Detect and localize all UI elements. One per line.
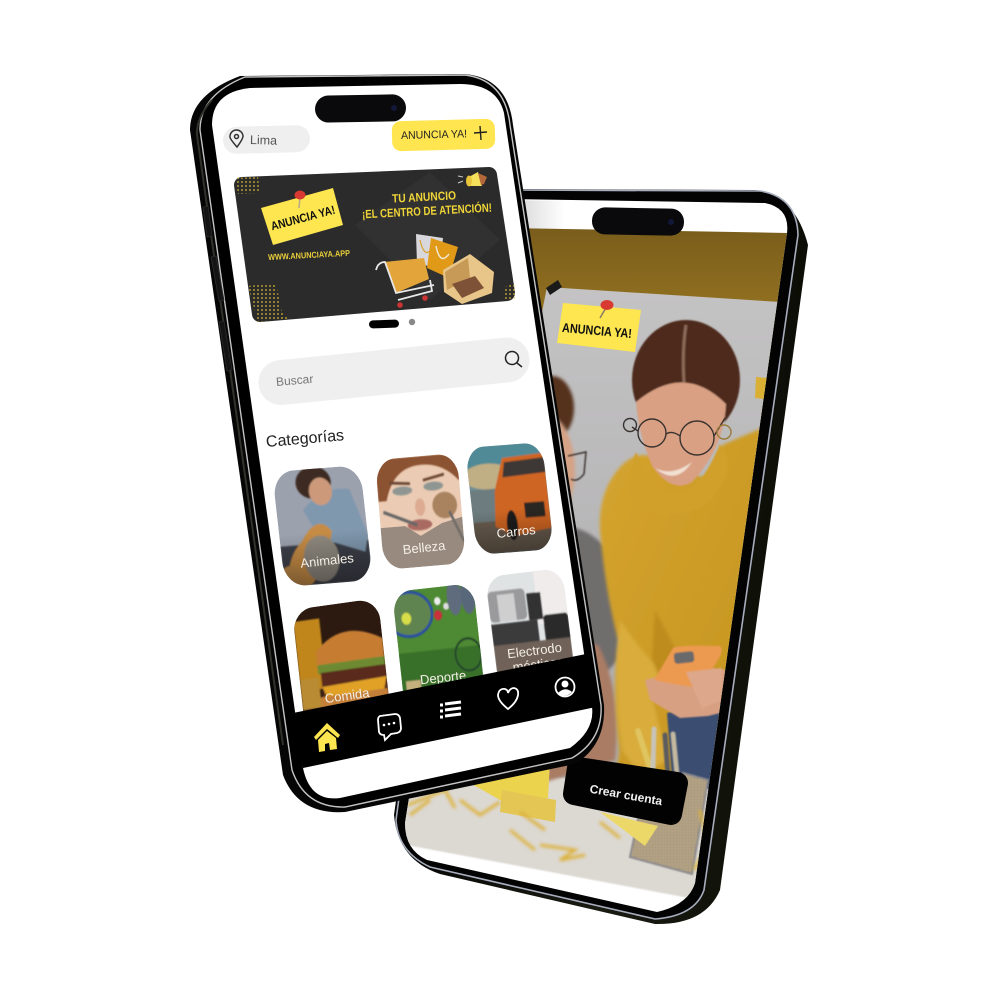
icon: list — [440, 702, 461, 717]
bag white — [416, 234, 443, 268]
banner — [235, 172, 516, 322]
bag yellow — [427, 238, 458, 278]
note text: ANUNCIA YA! — [269, 203, 337, 233]
megaphone icon — [458, 172, 487, 186]
pen holder — [630, 773, 708, 874]
icon: chat — [378, 714, 401, 740]
button: Anuncia ya — [392, 119, 495, 151]
photo: woman with phone — [380, 228, 790, 900]
card label: Deporte — [419, 668, 467, 687]
search icon — [506, 352, 522, 367]
side buttons — [203, 206, 232, 371]
heading: Categorías: Categorías — [265, 427, 345, 451]
front phone — [190, 74, 604, 812]
black tape — [546, 280, 562, 295]
button label: Crear cuenta — [589, 782, 664, 808]
shopping illustration — [376, 234, 494, 308]
whiteboard — [542, 287, 778, 778]
card label: Belleza — [402, 538, 447, 557]
search placeholder: Buscar — [275, 372, 314, 389]
icon: heart — [498, 688, 518, 709]
note text: ANUNCIA YA! — [562, 320, 633, 341]
location pill — [223, 125, 310, 154]
plus icon — [474, 126, 487, 140]
url: WWW.ANUNCIAYA.APP — [268, 248, 350, 262]
cart — [376, 258, 434, 308]
man's glasses — [568, 452, 586, 480]
carousel indicator — [369, 319, 415, 329]
jeans — [667, 700, 724, 790]
card label: mésticos — [512, 654, 565, 675]
icon: profile — [556, 678, 574, 696]
card label: Carros — [496, 522, 537, 541]
button label: ANUNCIA YA! — [401, 128, 467, 142]
card: Electrodomésticos — [488, 570, 573, 672]
sticky note — [261, 188, 343, 245]
card label: Animales — [300, 550, 355, 571]
table — [405, 777, 710, 898]
button: Crear cuenta — [574, 768, 677, 814]
back phone — [380, 189, 808, 924]
paper scraps — [408, 790, 708, 870]
icon: home — [314, 723, 340, 752]
location label: Lima — [250, 133, 277, 148]
front phone notch — [315, 94, 406, 123]
pens — [638, 729, 677, 775]
sticky note: Anuncia Ya — [557, 300, 641, 352]
front phone frame — [190, 74, 604, 812]
woman — [600, 428, 762, 780]
headline: ¡EL CENTRO DE ATENCIÓN! — [362, 200, 492, 221]
card: Belleza — [375, 453, 466, 570]
pin icon — [230, 130, 243, 147]
card: Animales — [272, 463, 373, 587]
top screen band — [505, 200, 565, 229]
headline: TU ANUNCIO — [392, 188, 456, 206]
back phone notch — [592, 207, 684, 236]
sticky notes — [474, 769, 550, 800]
banner dots — [235, 177, 516, 322]
card label: Electrodo — [506, 640, 563, 661]
card: Carros — [467, 443, 552, 554]
man — [549, 374, 619, 783]
front phone screen — [212, 84, 592, 798]
card label: Comida — [324, 685, 371, 706]
banner shapes — [355, 172, 500, 300]
room — [443, 254, 494, 304]
card: Comida — [294, 600, 388, 711]
back phone screen — [405, 199, 787, 912]
pin — [600, 300, 614, 318]
card: Deporte — [394, 585, 483, 691]
small yellow note — [755, 377, 767, 399]
hand and phone — [645, 646, 726, 718]
glasses — [624, 418, 731, 455]
yellow wall — [505, 228, 790, 420]
back phone frame — [394, 189, 808, 924]
pin — [294, 190, 306, 208]
search bar — [275, 352, 522, 389]
headline — [362, 188, 492, 221]
navigation bar — [293, 653, 596, 768]
